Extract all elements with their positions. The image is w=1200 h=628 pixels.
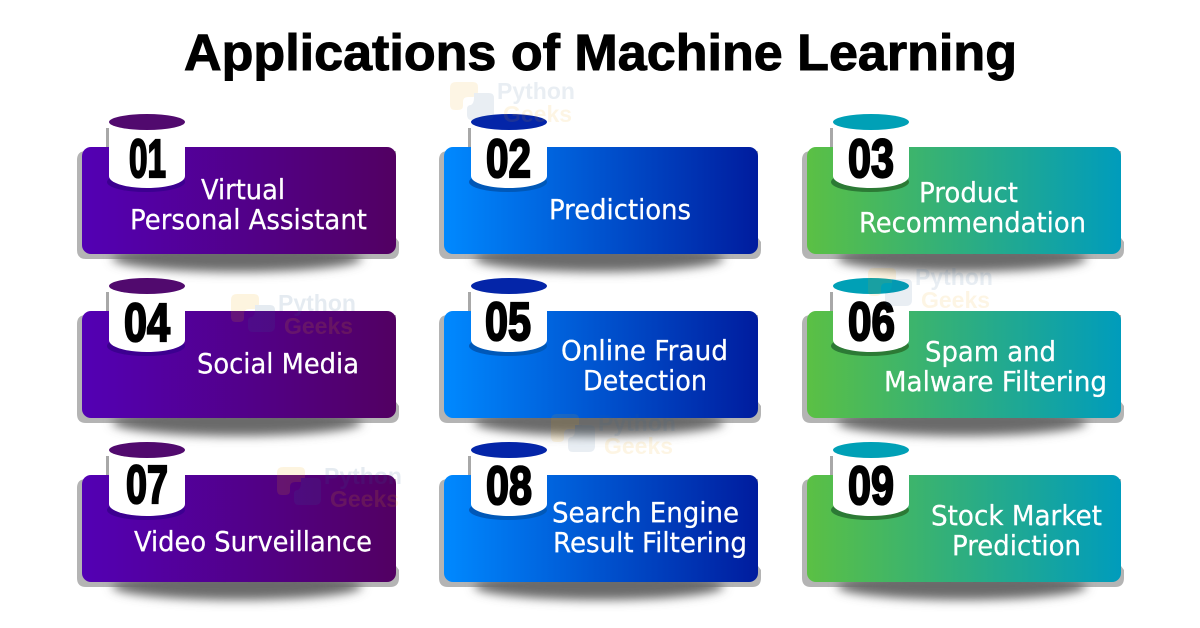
cylinder 02: 02 — [486, 129, 531, 189]
cylinder 03: 03 — [848, 129, 894, 189]
cylinder 01 — [106, 114, 185, 192]
cylinder 08: 08 — [486, 456, 532, 516]
cylinder 09: 09 — [848, 456, 894, 516]
card 01: Virtual Personal Assistant — [77, 114, 399, 272]
card 09: Stock Market Prediction: Prediction — [952, 529, 1081, 562]
watermark: row 2 right — [868, 264, 993, 313]
watermark: over card 07: Python — [324, 463, 402, 489]
watermark: row 2 left — [231, 290, 356, 339]
card 05: Online Fraud Detection: Online Fraud — [561, 334, 728, 367]
title: Applications of Machine Learning — [184, 24, 1017, 81]
cylinder 06 — [830, 278, 909, 356]
cylinder 06: 06 — [848, 292, 895, 352]
cylinder 04 — [106, 278, 185, 356]
watermark: row 3 centre: Geeks — [604, 433, 673, 459]
card 09: Stock Market Prediction: Stock Market — [931, 499, 1102, 532]
watermark: over card 07 — [277, 463, 402, 512]
card 02: Predictions — [439, 114, 761, 272]
card 08: Search Engine Result Filtering: Result Filtering — [553, 526, 747, 559]
card 06: Spam and Malware Filtering: Malware Filtering — [884, 365, 1107, 398]
card 04: Social Media — [77, 278, 399, 436]
card 02: Predictions: Predictions — [549, 193, 691, 226]
watermark: row 2 right: Python — [915, 264, 993, 290]
card 05: Online Fraud Detection: Detection — [583, 364, 707, 397]
watermark: row 2 right: Geeks — [921, 287, 990, 313]
card 06: Spam and Malware Filtering: Spam and — [925, 335, 1056, 368]
card 05: Online Fraud Detection — [439, 278, 761, 436]
cylinder 04: 04 — [124, 293, 170, 353]
cylinder 09 — [830, 442, 909, 520]
watermark: row 3 centre — [551, 410, 676, 459]
cylinder 07: 07 — [126, 455, 168, 515]
card 04: Social Media: Social Media — [197, 347, 359, 380]
card 03: Product Recommendation: Product — [919, 176, 1018, 209]
cylinder 07 — [106, 442, 185, 520]
cylinder 05 — [468, 278, 547, 356]
card 01: Virtual Personal Assistant: Virtual — [201, 173, 285, 206]
card 08: Search Engine Result Filtering — [439, 442, 761, 600]
watermark: row 2 left: Geeks — [284, 313, 353, 339]
cylinder 05: 05 — [485, 292, 531, 352]
cylinder 03 — [830, 114, 909, 192]
card 03: Product Recommendation: Recommendation — [859, 206, 1086, 239]
card 07: Video Surveillance: Video Surveillance — [134, 525, 372, 558]
card 06: Spam and Malware Filtering — [802, 278, 1124, 436]
card 03: Product Recommendation — [802, 114, 1124, 272]
watermark: top centre: Python — [497, 78, 575, 104]
card 07: Video Surveillance — [77, 442, 399, 600]
watermark: over card 07: Geeks — [330, 486, 399, 512]
card 08: Search Engine Result Filtering: Search Engine — [552, 496, 739, 529]
watermark: row 2 left: Python — [278, 290, 356, 316]
cylinder 02 — [468, 114, 547, 192]
card 01: Virtual Personal Assistant: Personal Assistant — [130, 203, 367, 236]
card 09: Stock Market Prediction — [802, 442, 1124, 600]
cylinder 08 — [468, 442, 547, 520]
watermark: top centre — [450, 78, 575, 127]
watermark: row 3 centre: Python — [598, 410, 676, 436]
cylinder 01: 01 — [129, 129, 166, 189]
watermark: top centre: Geeks — [503, 101, 572, 127]
